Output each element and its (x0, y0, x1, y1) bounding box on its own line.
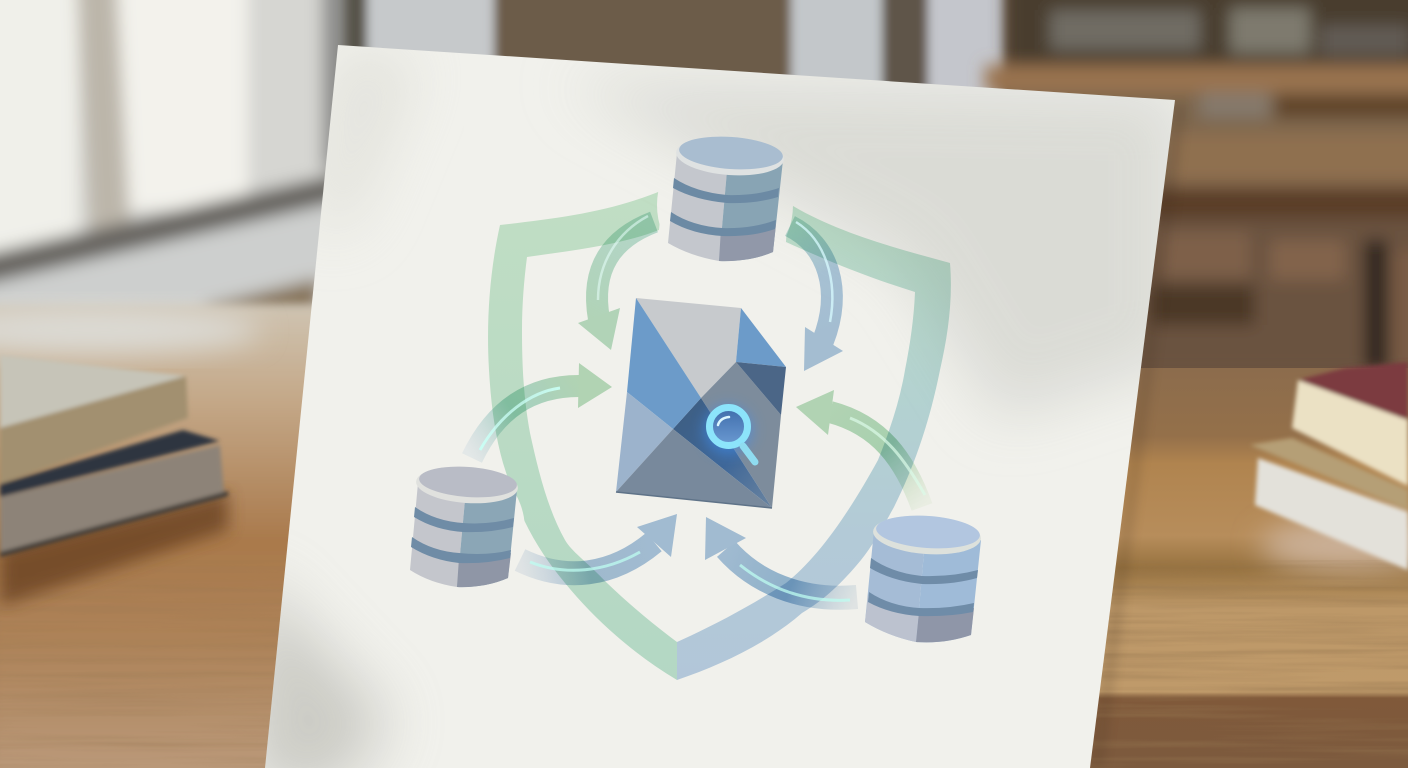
facet: top right blue (736, 308, 786, 367)
arrow: top database to document, blue (790, 226, 843, 371)
facet: bottom grey (616, 429, 772, 508)
table: left side (0, 305, 340, 768)
database: left (410, 463, 519, 587)
table reflection, right (1260, 519, 1408, 571)
arrow highlight: bottom left (530, 552, 640, 570)
halo: top database (657, 133, 793, 277)
paper sheet (265, 45, 1175, 768)
shield: two-tone outline (488, 190, 951, 680)
icon: magnifying glass (704, 406, 755, 462)
books: right stack (1250, 362, 1408, 570)
books: left stack (0, 355, 228, 606)
light and shadow bands on paper (250, 45, 1180, 768)
arrow highlight: right (850, 418, 925, 495)
document bottom edge (616, 492, 772, 508)
shield right half (677, 203, 951, 680)
halo: right database (861, 515, 985, 655)
arrow: right database to document (796, 390, 922, 507)
database: top (668, 133, 785, 261)
arrow: right database bottom to document (705, 517, 857, 598)
document with facets (616, 298, 786, 508)
facet: top grey fold (636, 298, 741, 398)
arrow highlight: left (480, 388, 560, 450)
facet: mid grey right (701, 362, 781, 508)
shelves, right (985, 0, 1408, 373)
arrow highlight: bottom right (740, 565, 850, 600)
facet: dark navy (736, 362, 786, 415)
facet: left light blue (616, 392, 673, 492)
arrow: left database bottom to document (520, 514, 677, 573)
table: right side (1080, 368, 1408, 768)
facet: dark blue behind lens (673, 398, 772, 508)
arrow highlight: top right (796, 222, 832, 322)
shield left half (488, 190, 677, 680)
arrow highlight: top left (598, 216, 648, 300)
top band behind paper (345, 0, 1006, 100)
arrow: top database to document, green (578, 222, 654, 350)
table reflection, left (0, 306, 260, 354)
book shadow on table (0, 492, 228, 606)
database: right (865, 512, 982, 642)
arrow: left database to document (472, 363, 612, 458)
paper shadow on table (1090, 100, 1186, 768)
facet: left blue (627, 298, 701, 429)
halo: left database (401, 462, 525, 598)
window wall, left (0, 0, 370, 370)
